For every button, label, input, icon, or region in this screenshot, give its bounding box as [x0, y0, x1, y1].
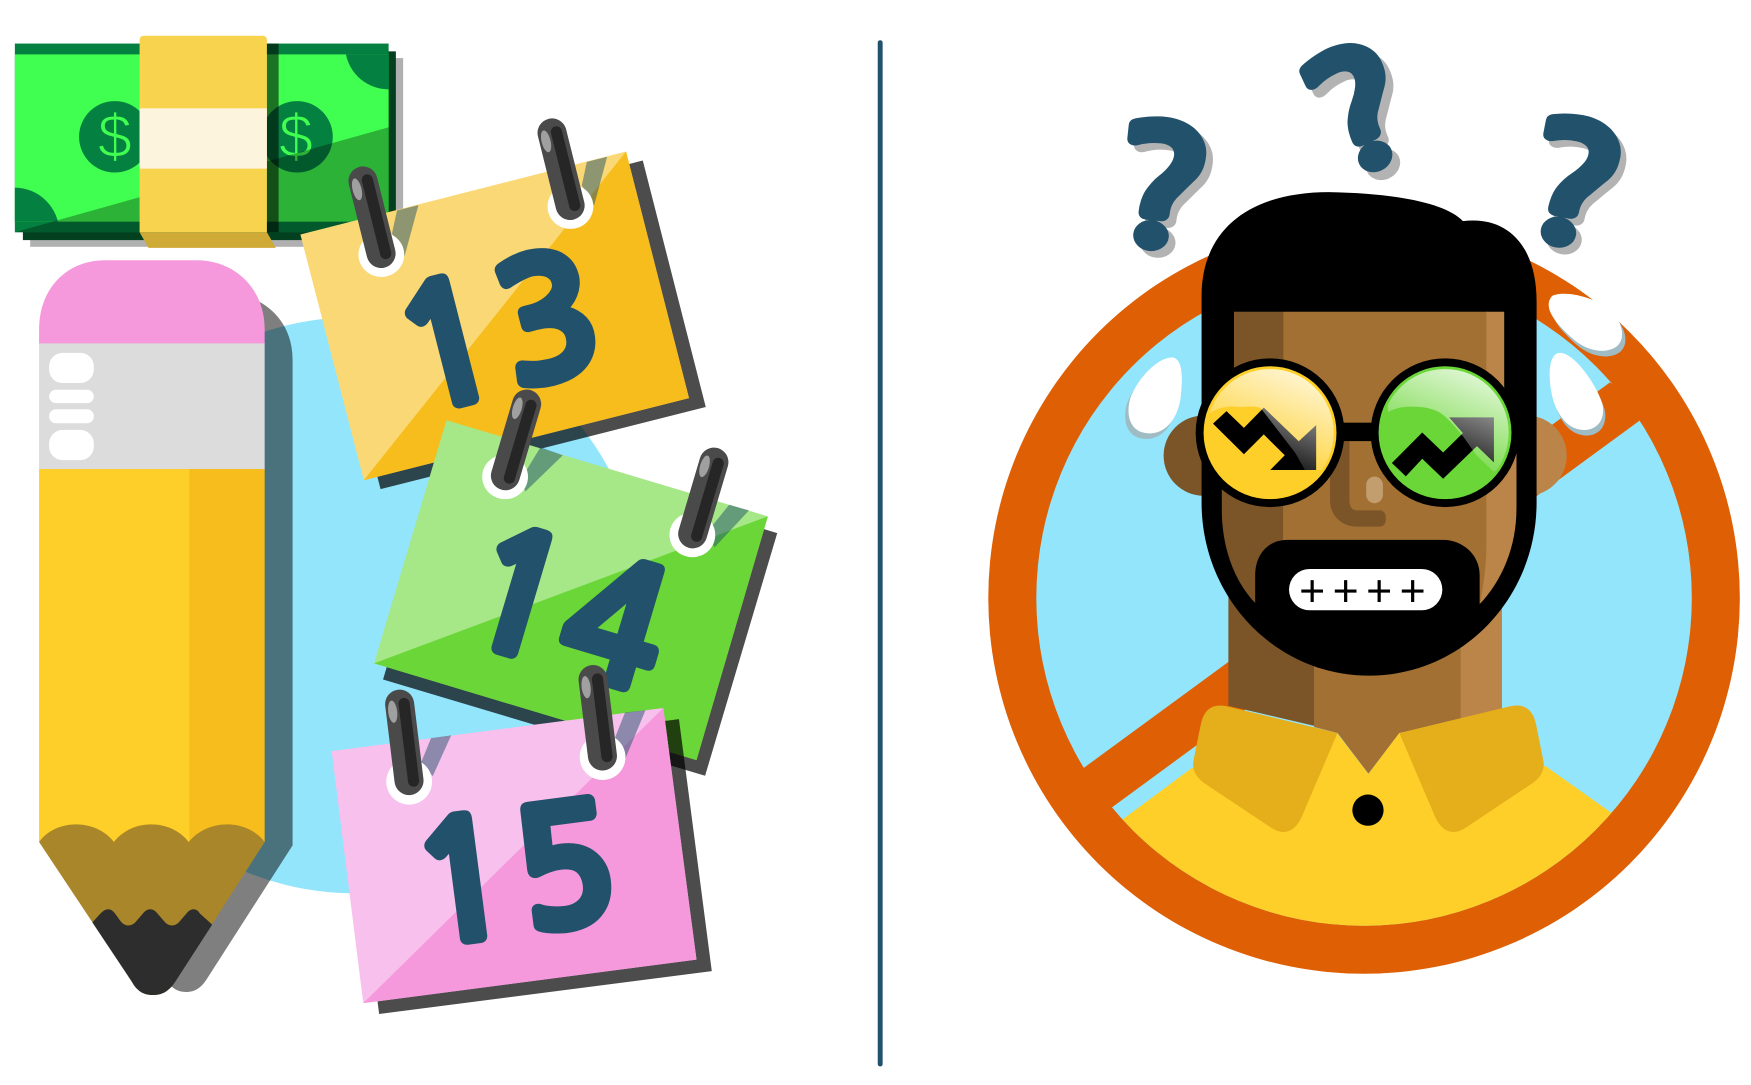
face — [1222, 312, 1516, 604]
calendar page 14 — [374, 386, 777, 776]
paper band — [140, 36, 276, 248]
ear right — [1486, 415, 1567, 496]
glasses bridge — [1340, 423, 1376, 441]
question mark left: ? — [1109, 112, 1226, 281]
binding ring right — [534, 115, 607, 229]
mouth — [1289, 567, 1442, 616]
panel: confused investor — [988, 21, 1740, 1005]
bill shadow — [30, 58, 403, 247]
binding ring left — [482, 386, 563, 499]
pencil shadow — [168, 302, 293, 992]
dollar sign left: $ — [98, 102, 132, 171]
bill border — [15, 44, 389, 232]
question mark right: ? — [1513, 106, 1642, 282]
lens left: market down — [1196, 358, 1344, 507]
question mark right: ? — [1507, 100, 1637, 276]
glasses — [1196, 358, 1519, 507]
nose — [1330, 441, 1386, 527]
collar left — [1193, 706, 1337, 832]
pencil wood tip — [39, 824, 265, 995]
date number 15: 15 — [404, 784, 629, 970]
pencil ferrule — [39, 343, 265, 470]
question mark centre: ? — [1290, 29, 1446, 213]
calendar page 15 — [332, 663, 712, 1014]
binding ring right — [669, 444, 749, 557]
sweat drop right — [1550, 353, 1605, 436]
band shadow — [267, 44, 279, 232]
dollar sign right: $ — [279, 102, 313, 171]
sweat drop left — [1125, 357, 1182, 439]
binding ring left — [345, 163, 418, 277]
background circle — [67, 317, 643, 893]
question mark left: ? — [1102, 105, 1219, 275]
sweat drop upper right — [1549, 294, 1625, 356]
icon: pencil — [39, 260, 293, 995]
icon: money bill — [14, 36, 404, 248]
hair and head outline — [1202, 192, 1537, 676]
beard — [1255, 540, 1480, 668]
calendar page 13 — [300, 115, 706, 489]
shirt — [1122, 732, 1612, 926]
shirt button — [1352, 795, 1384, 826]
lens right: market up — [1371, 358, 1519, 507]
collar right — [1399, 706, 1544, 832]
vertical divider — [878, 40, 883, 1066]
binding ring right — [577, 663, 645, 780]
ear left — [1164, 415, 1244, 496]
question mark centre: ? — [1282, 21, 1438, 206]
pencil body — [39, 469, 265, 842]
prohibition ring — [988, 222, 1740, 974]
pencil lead — [92, 909, 212, 995]
teeth: ++++ — [1299, 567, 1426, 616]
panel: deadline pressures — [0, 2, 777, 1014]
date number 13: 13 — [379, 229, 621, 439]
date number 14: 14 — [446, 506, 688, 718]
bill face — [14, 54, 389, 232]
neck — [1228, 558, 1502, 774]
pencil eraser — [39, 260, 265, 344]
binding ring left — [383, 688, 451, 805]
